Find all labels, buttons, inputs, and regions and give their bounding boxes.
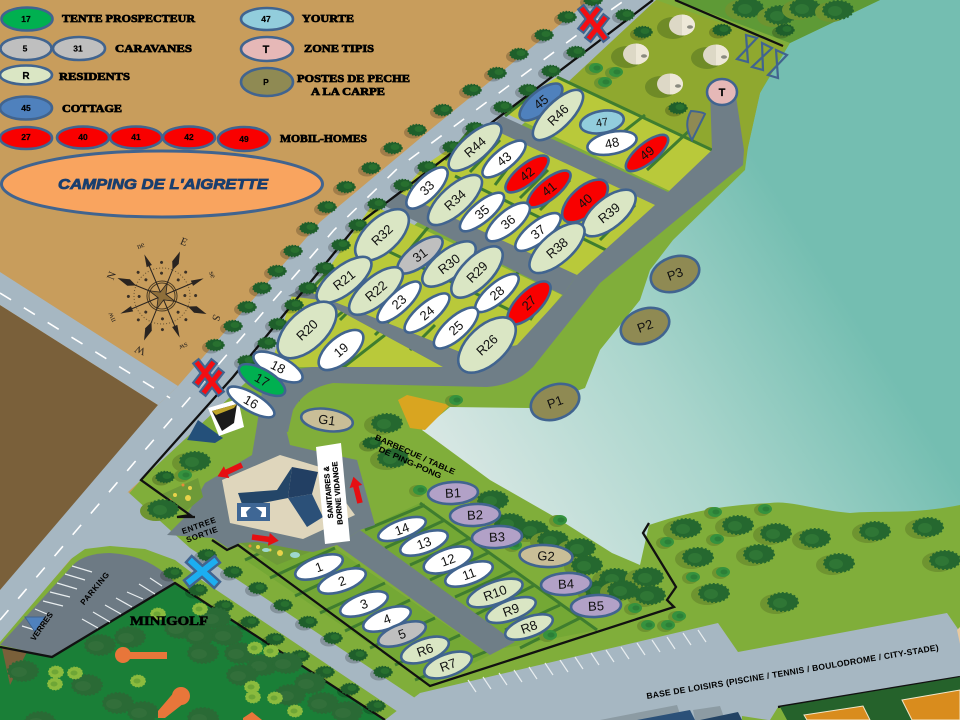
zone G2 [519, 544, 573, 568]
plot 36 [480, 196, 536, 248]
plot 4: 4 [381, 611, 393, 627]
plot 43: 43 [494, 149, 514, 169]
compass rose: nw [105, 311, 118, 324]
plot R30 [415, 233, 483, 295]
entrance labels: ENTREE [181, 515, 218, 536]
red arrow left [215, 459, 245, 482]
fishing post P3: P3 [665, 264, 685, 284]
plot 2: 2 [336, 573, 348, 589]
plot 5 [375, 616, 429, 652]
label: base de loisirs: BASE DE LOISIRS (PISCINE / TENNIS / BOULODROME / CITY-STADE) [646, 642, 939, 701]
plot 25 [428, 301, 484, 355]
plot 19 [312, 323, 370, 377]
sign: sanitaires [316, 443, 350, 544]
compass rose [82, 214, 245, 379]
plot R29 [443, 238, 511, 306]
zone tipis T: T [719, 87, 726, 99]
plot R46 [525, 82, 591, 148]
zone B2 [449, 503, 501, 527]
fishing post P1 [526, 377, 584, 427]
plot block R32-27 [312, 205, 562, 352]
plot 14 [375, 512, 429, 546]
plot R6: R6 [415, 640, 435, 660]
plot 24: 24 [417, 303, 437, 323]
marker: red cross north-east [583, 10, 604, 37]
plot 33 [400, 161, 454, 215]
plot R8: R8 [519, 617, 539, 637]
plot 36: 36 [498, 212, 518, 232]
legend: postes de peche: A LA CARPE [311, 87, 385, 98]
plot R21: R21 [330, 267, 358, 293]
plot R20: R20 [293, 316, 321, 344]
zone B3: B3 [489, 529, 505, 545]
plot 37 [510, 207, 566, 257]
road: horizontal road [0, 272, 178, 405]
legend: mobil-homes: 40 [78, 132, 88, 142]
road: south lane [337, 530, 515, 655]
fishing post P2: P2 [635, 316, 655, 336]
legend: tente prospecteur: TENTE PROSPECTEUR [62, 14, 195, 25]
plot R8 [502, 609, 556, 645]
label: barbecue: DE PING-PONG [377, 445, 443, 481]
legend: mobil-homes: 27 [21, 132, 31, 142]
plot R38 [521, 214, 593, 282]
tennis and leisure buildings [600, 677, 960, 720]
legend: yourte: 47 [261, 14, 271, 24]
plot R32: R32 [368, 221, 396, 249]
compass rose: E [178, 235, 189, 249]
tipis [611, 14, 729, 98]
plot 42: 42 [517, 164, 537, 184]
plot 3 [337, 586, 391, 622]
plot 27: 27 [519, 293, 539, 313]
plot 14: 14 [393, 519, 411, 539]
plot R39 [575, 181, 643, 245]
plot R44 [442, 116, 508, 178]
zone B2: B2 [467, 507, 483, 523]
plot R7: R7 [438, 655, 458, 675]
plot 48 [585, 127, 639, 159]
legend: mobil-homes: 49 [239, 134, 249, 144]
plot 16: 16 [241, 392, 261, 412]
small earth wedge [2, 648, 27, 685]
road: upper lane [257, 90, 744, 432]
plot 33: 33 [417, 178, 437, 198]
legend: residents: RESIDENTS [59, 72, 130, 83]
legend: tente prospecteur [2, 8, 195, 30]
plot 28 [470, 268, 524, 318]
plot R9: R9 [501, 600, 521, 620]
brown field left [0, 305, 158, 592]
legend: zone tipis [241, 37, 374, 61]
legend: mobil-homes: 41 [131, 132, 141, 142]
plot 17 [234, 358, 290, 402]
legend: postes de peche: P [263, 77, 269, 87]
sign: sanitaires: SANITAIRES & [322, 465, 335, 519]
marker: blue cross [190, 562, 214, 582]
plot 23 [372, 276, 426, 328]
minigolf ground [0, 583, 385, 720]
plot block 45-49 [503, 77, 712, 192]
plot 47: 47 [595, 116, 609, 130]
icon: verres triangle [25, 617, 45, 632]
plot R10: R10 [481, 582, 509, 604]
legend: mobil-homes: 42 [184, 132, 194, 142]
road: south-west and south-east road [0, 492, 430, 720]
title oval: CAMPING DE L'AIGRETTE [58, 176, 269, 193]
plot R38: R38 [543, 235, 571, 261]
plot 11: 11 [460, 565, 478, 583]
peach corner [957, 627, 960, 644]
entrance labels: SORTIE [185, 525, 219, 545]
entrance labels [181, 515, 219, 545]
plot 35 [455, 187, 509, 237]
legend: zone tipis: T [263, 44, 270, 56]
legend: tente prospecteur: 17 [21, 14, 31, 24]
legend: zone tipis: ZONE TIPIS [304, 44, 374, 55]
flowerbeds [160, 478, 310, 565]
plot R29: R29 [463, 258, 491, 286]
title oval [2, 151, 322, 217]
plot 11 [442, 556, 496, 592]
trees roadside [160, 0, 634, 714]
zone B1: B1 [445, 485, 461, 501]
fishing post P1: P1 [545, 392, 565, 412]
plot R30: R30 [435, 251, 463, 277]
fishing post P2 [616, 301, 674, 351]
zone G2: G2 [537, 548, 555, 564]
plot 24 [399, 287, 455, 339]
parking [0, 553, 175, 657]
plot 13: 13 [415, 533, 433, 553]
zone G1: G1 [317, 411, 337, 429]
road: lane between blocks [288, 288, 462, 368]
road: middle lane [385, 193, 577, 295]
plot 31: 31 [410, 245, 430, 265]
plot 45 [514, 77, 568, 127]
plot 40: 40 [575, 191, 595, 211]
fishing post P3 [646, 249, 704, 299]
half pond [687, 111, 705, 140]
plot R9 [483, 592, 539, 628]
zone B5 [570, 594, 622, 618]
plot R26: R26 [473, 331, 501, 359]
plot 23: 23 [389, 292, 409, 312]
zone G1 [300, 405, 354, 435]
plot 41: 41 [539, 179, 559, 199]
camp road network [167, 90, 744, 655]
plot R10 [464, 573, 526, 613]
legend: mobil-homes [0, 126, 367, 151]
plot 48: 48 [603, 134, 621, 152]
lake with gradient [422, 0, 960, 565]
plot 37: 37 [528, 222, 548, 242]
marker: red cross entrance [198, 364, 219, 391]
plot R22 [342, 259, 410, 323]
label: verres: VERRES [29, 610, 55, 643]
plot 12 [420, 541, 476, 579]
trees camp and shore [140, 0, 960, 642]
plot 3: 3 [358, 596, 370, 612]
legend: caravanes [0, 37, 192, 60]
legend: cottage: COTTAGE [62, 104, 122, 115]
legend: yourte: YOURTE [302, 14, 354, 25]
legend: postes de peche [241, 68, 410, 98]
compass rose: N [105, 270, 119, 282]
minigolf trees [8, 603, 362, 720]
plot R46: R46 [544, 101, 572, 129]
legend: yourte [241, 8, 354, 30]
legend: residents [0, 66, 130, 84]
zone tipis T [707, 79, 737, 105]
plot 17: 17 [252, 370, 272, 390]
plot block R44-R39 [395, 128, 656, 275]
plot 27 [501, 275, 557, 331]
plot 1: 1 [313, 559, 325, 575]
zone B3 [471, 525, 523, 549]
leisure base road [385, 613, 960, 720]
road: sanitary ring [167, 425, 375, 552]
plot 19: 19 [331, 340, 351, 360]
plot 18 [249, 345, 307, 389]
compass rose: sw [177, 341, 189, 352]
sign: sanitaires: BORNE VIDANGE [330, 461, 345, 525]
plot R20 [268, 292, 346, 368]
road: main north-east road [0, 0, 656, 642]
legend: residents: R [22, 71, 30, 82]
plot R44: R44 [461, 134, 489, 160]
plot block 14-R8 [358, 503, 597, 648]
plot 13 [397, 525, 451, 561]
red arrow bottom [251, 531, 280, 547]
parking bay lines [22, 566, 162, 630]
plot R21 [309, 249, 379, 311]
zone B4 [540, 572, 592, 596]
legend: mobil-homes: MOBIL-HOMES [280, 134, 367, 145]
minigolf orange holes [115, 647, 262, 720]
plot R34 [420, 167, 490, 233]
plot 41 [522, 165, 576, 213]
plot R32 [346, 200, 418, 270]
legend: caravanes: 5 [23, 44, 28, 54]
legend: postes de peche: POSTES DE PECHE [297, 74, 410, 85]
legend: cottage: 45 [21, 103, 31, 113]
plot 31 [392, 230, 448, 280]
zone B1 [427, 481, 479, 505]
plot block 1-R7 [245, 547, 490, 685]
label: minigolf: MINIGOLF [130, 613, 208, 628]
legend: caravanes: CARAVANES [115, 44, 192, 55]
compass rose: se [207, 270, 218, 280]
compass rose: ne [135, 240, 146, 251]
compass rose: S [209, 313, 222, 323]
zone B5: B5 [588, 598, 604, 614]
plot block R20-19 [272, 295, 443, 367]
plot 40 [555, 172, 615, 230]
plot R26 [448, 307, 526, 383]
plot R34: R34 [441, 186, 469, 214]
base parking bay lines [468, 630, 706, 692]
plot 25: 25 [446, 318, 466, 338]
plot 49: 49 [637, 143, 657, 163]
plot 47 [578, 107, 626, 137]
plot 1 [292, 549, 346, 585]
forest zone top right [675, 0, 880, 43]
plot 43 [477, 135, 531, 183]
plot R22: R22 [362, 278, 390, 304]
plot 16 [224, 381, 278, 423]
road dashes [0, 0, 625, 620]
hourglass markers [737, 35, 787, 78]
tipi zone field [557, 0, 785, 160]
plot 2 [315, 563, 369, 599]
beach [398, 395, 450, 430]
zone B4: B4 [558, 576, 574, 592]
plot 49 [621, 129, 673, 177]
compass rose: W [133, 342, 147, 357]
plot dividers [240, 77, 712, 680]
plot R6 [398, 631, 452, 669]
plot 28: 28 [487, 283, 507, 303]
plot 4 [360, 601, 414, 637]
plot R39: R39 [595, 200, 623, 226]
label: parking: PARKING [79, 570, 112, 607]
legend: cottage [0, 96, 122, 120]
plot R7 [421, 646, 475, 684]
plot 35: 35 [472, 202, 492, 222]
red arrow right [347, 475, 366, 505]
plot 42 [500, 150, 554, 198]
sanitary building [222, 455, 355, 539]
legend: caravanes: 31 [73, 44, 83, 54]
plot 12: 12 [439, 550, 457, 570]
plot 18: 18 [268, 357, 288, 377]
plot 5: 5 [396, 626, 408, 642]
label: barbecue: BARBECUE / TABLE [373, 433, 457, 477]
trash icon [187, 399, 244, 443]
plot 45: 45 [531, 92, 551, 112]
icon: reception house [237, 503, 270, 521]
